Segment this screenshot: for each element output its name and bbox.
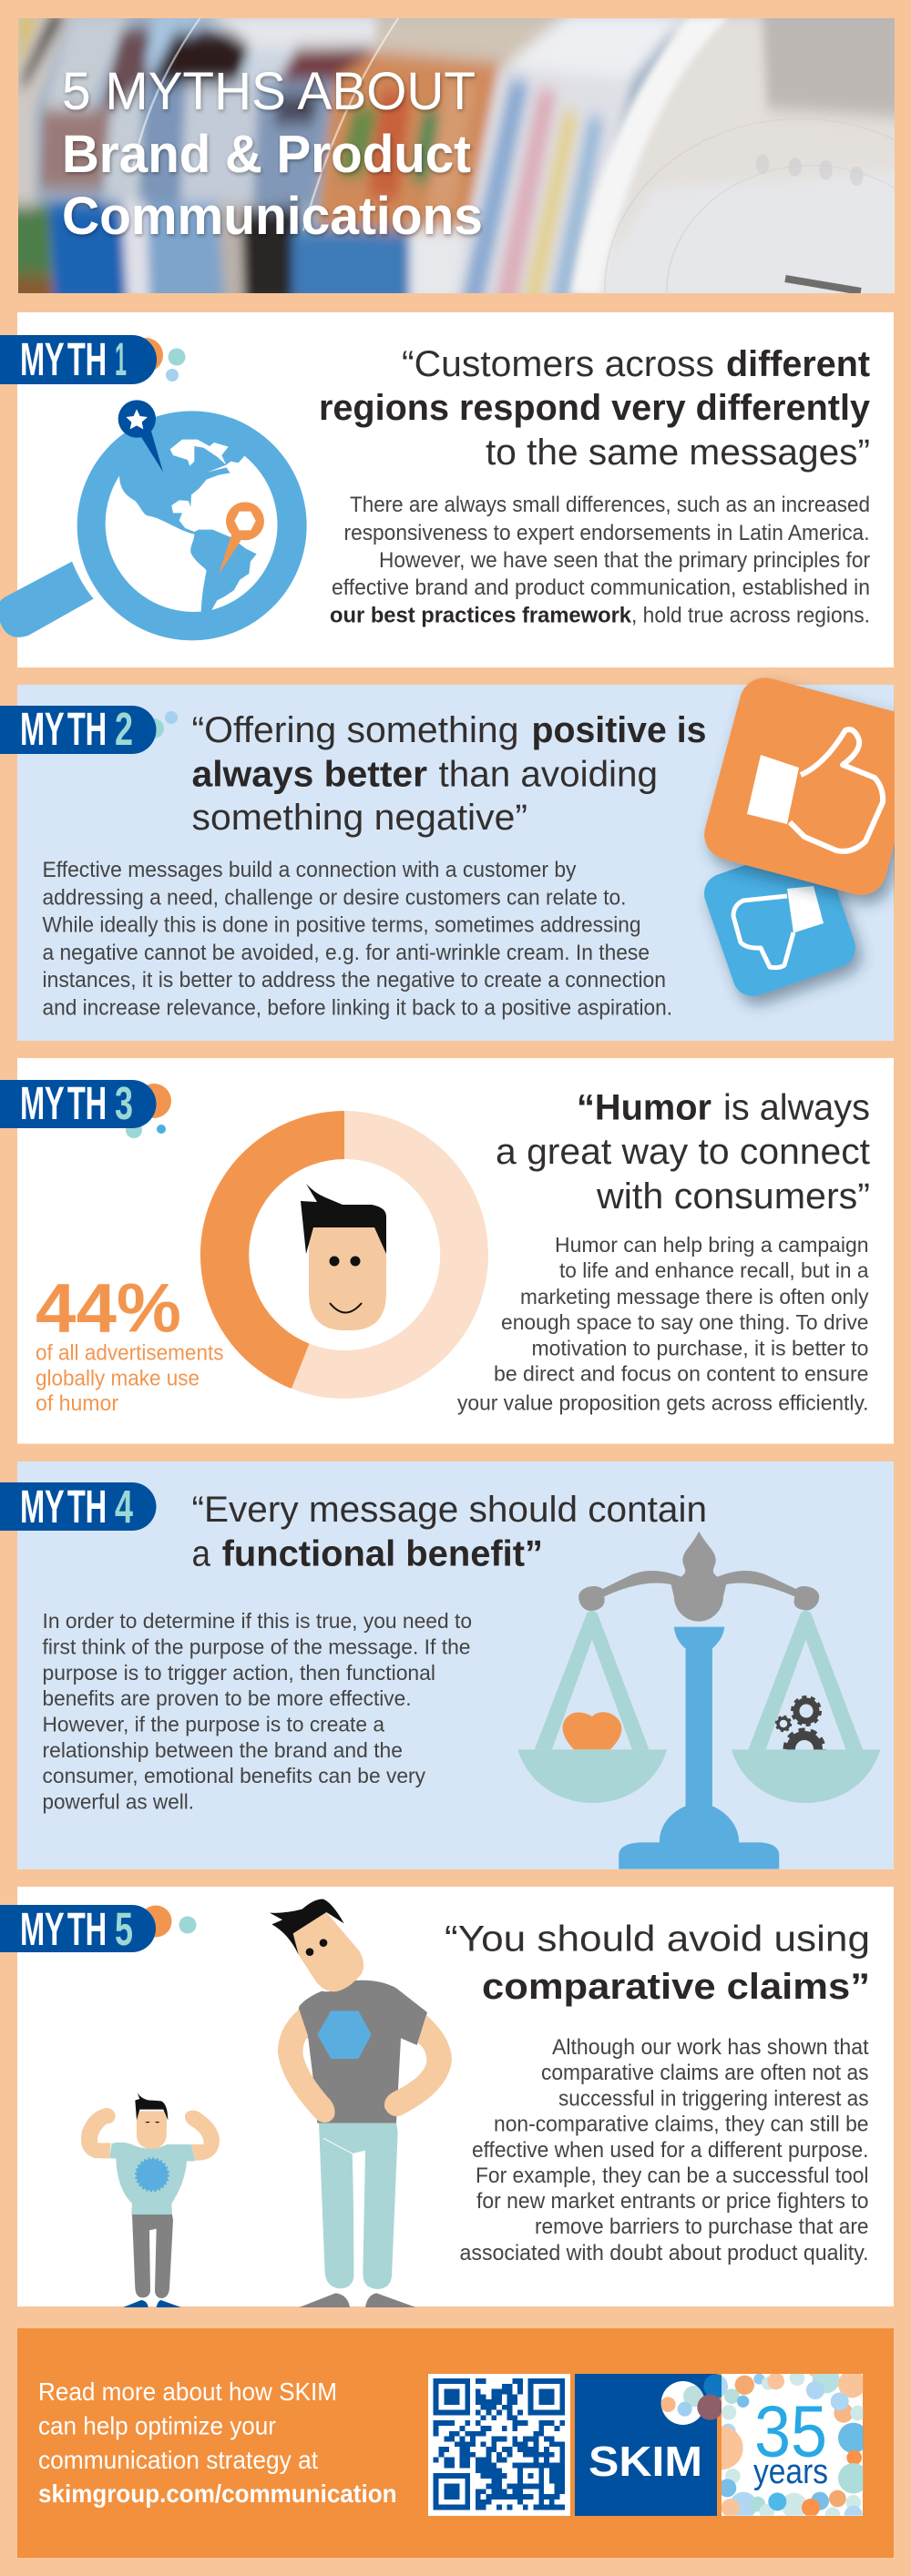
- body text: myth 1: , hold true across regions.: [631, 603, 870, 628]
- heading: myth 5: “You should avoid using: [445, 1919, 870, 1959]
- body text: myth 5: successful in triggering interest as: [558, 2087, 869, 2112]
- heading: myth 1: [319, 344, 871, 473]
- panel: footer call to action: [17, 2328, 894, 2558]
- body text: myth 4: powerful as well.: [42, 1790, 194, 1814]
- heading: myth 1: regions respond very differently: [319, 388, 871, 428]
- heading: myth 5: [445, 1919, 870, 2007]
- text: read more: skimgroup.com/communication: [38, 2479, 397, 2508]
- body text: myth 5: non-comparative claims, they can still be: [494, 2113, 869, 2136]
- body text: myth 3: to life and enhance recall, but in a: [559, 1258, 869, 1282]
- body text: myth 4: relationship between the brand and the: [42, 1738, 403, 1762]
- badge: myth 1: [0, 333, 186, 386]
- body text: myth 2: instances, it is better to address the negative to create a connection: [42, 968, 666, 993]
- heading: myth 4: [191, 1490, 707, 1573]
- illustration: small man: [81, 2092, 220, 2307]
- text: read more: [38, 2377, 397, 2508]
- icon: balance scale: [517, 1532, 880, 1869]
- panel: myth 2: [0, 672, 911, 1041]
- heading: myth 5: comparative claims”: [482, 1967, 870, 2007]
- panel: myth 4: [0, 1461, 894, 1869]
- header banner: [18, 18, 895, 293]
- body text: myth 1: responsiveness to expert endorsements in Latin America.: [344, 521, 869, 545]
- panel: myth 5: [0, 1887, 894, 2307]
- body text: myth 2: and increase relevance, before linking it back to a positive aspiration.: [42, 996, 672, 1020]
- banner photo: blurred printing press roll: [18, 18, 895, 293]
- QR code: [428, 2374, 570, 2516]
- heading: myth 2: “Offering something: [191, 710, 519, 750]
- body text: myth 4: benefits are proven to be more effective.: [42, 1686, 412, 1710]
- panel: myth 1: [0, 312, 894, 667]
- icon: thumbs down: [699, 840, 861, 1002]
- badge: myth 2: [0, 703, 178, 756]
- donut chart: 44%: [200, 1111, 488, 1399]
- body text: myth 5: effective when used for a different purpose.: [472, 2138, 869, 2163]
- badge: myth 1: 1: [115, 333, 127, 385]
- body text: myth 4: first think of the purpose of the message. If the: [42, 1635, 470, 1659]
- heading: myth 4: functional benefit”: [222, 1533, 543, 1573]
- heading: myth 4: a: [191, 1533, 211, 1573]
- badge: myth 5: 5: [115, 1903, 133, 1955]
- heading: myth 1: to the same messages”: [486, 433, 870, 473]
- body text: myth 5: Although our work has shown that: [552, 2035, 869, 2060]
- icon: magnifying glass globe: [0, 400, 307, 640]
- badge: myth 5: MYTH: [20, 1904, 107, 1956]
- icon: thumbs up: [699, 672, 911, 901]
- badge: myth 4: MYTH: [20, 1481, 107, 1533]
- body text: myth 1: There are always small differences, such as an increased: [350, 493, 870, 517]
- title: [62, 62, 483, 246]
- statistic: 44%: 44%: [36, 1269, 181, 1348]
- statistic: 44%: globally make use: [36, 1367, 200, 1391]
- heading: myth 2: than avoiding: [439, 754, 658, 794]
- logo: 35 years: 35: [754, 2391, 827, 2471]
- text: read more: can help optimize your: [38, 2411, 276, 2440]
- body text: myth 4: purpose is to trigger action, then functional: [42, 1661, 435, 1685]
- badge: myth 2: MYTH: [20, 704, 107, 756]
- panel: myth 3: [0, 1058, 894, 1444]
- heading: myth 2: [191, 710, 707, 838]
- heading: myth 3: [496, 1087, 870, 1217]
- body text: myth 3: motivation to purchase, it is better to: [532, 1337, 869, 1360]
- body text: myth 5: [459, 2035, 869, 2265]
- body text: myth 2: addressing a need, challenge or desire customers can relate to.: [42, 886, 627, 911]
- body text: myth 3: enough space to say one thing. To drive: [501, 1310, 869, 1334]
- icon: star pin: [118, 400, 163, 472]
- heading: myth 1: “Customers across: [402, 344, 714, 384]
- body text: myth 3: marketing message there is often only: [520, 1285, 869, 1308]
- body text: myth 1: However, we have seen that the primary principles for: [379, 548, 870, 573]
- badge: myth 4: [0, 1481, 157, 1533]
- heading: myth 3: “Humor: [577, 1087, 711, 1127]
- heading: myth 4: “Every message should contain: [191, 1490, 707, 1530]
- title: 5 MYTHS ABOUT: [62, 62, 476, 121]
- statistic: 44%: of humor: [36, 1391, 118, 1416]
- logo: 35 years: years: [753, 2453, 828, 2491]
- body text: myth 1: [330, 493, 870, 628]
- icon: gears: [776, 1697, 824, 1768]
- body text: myth 2: While ideally this is done in positive terms, sometimes addressing: [42, 912, 641, 938]
- body text: myth 5: comparative claims are often not as: [541, 2061, 869, 2085]
- badge: myth 3: 3: [115, 1077, 133, 1129]
- body text: myth 3: [457, 1233, 869, 1415]
- heading: myth 3: with consumers”: [596, 1176, 870, 1217]
- title: Brand & Product: [62, 125, 471, 184]
- body text: myth 4: consumer, emotional benefits can be very: [42, 1764, 425, 1787]
- statistic: 44%: [36, 1269, 224, 1416]
- heading: myth 3: is always: [723, 1087, 870, 1127]
- logo: 35 years: [722, 2374, 864, 2516]
- badge: myth 3: [0, 1077, 171, 1138]
- logo: SKIM: SKIM: [589, 2438, 702, 2485]
- body text: myth 3: your value proposition gets across efficiently.: [457, 1391, 869, 1415]
- body text: myth 5: For example, they can be a successful tool: [476, 2164, 869, 2188]
- badge: myth 3: MYTH: [20, 1078, 107, 1130]
- body text: myth 4: In order to determine if this is true, you need to: [42, 1609, 472, 1633]
- logo: SKIM: [575, 2374, 728, 2516]
- heading: myth 2: always better: [191, 754, 427, 794]
- body text: myth 2: Effective messages build a connection with a customer by: [42, 858, 576, 882]
- icon: smiling face: [301, 1184, 386, 1330]
- text: read more: Read more about how SKIM: [38, 2377, 337, 2406]
- icon: hexagon pin: [219, 502, 264, 575]
- body text: myth 3: be direct and focus on content to ensure: [494, 1362, 869, 1386]
- heading: myth 2: something negative”: [191, 798, 527, 838]
- body text: myth 2: [42, 858, 672, 1020]
- heading: myth 2: positive is: [532, 710, 707, 750]
- body text: myth 5: for new market entrants or price fighters to: [476, 2189, 869, 2214]
- illustration: tall man: [270, 1899, 452, 2307]
- body text: myth 5: remove barriers to purchase that are: [535, 2215, 869, 2239]
- statistic: 44%: of all advertisements: [36, 1340, 224, 1365]
- heading: myth 3: a great way to connect: [496, 1132, 870, 1172]
- body text: myth 1: our best practices framework: [330, 603, 632, 628]
- badge: myth 2: 2: [115, 703, 133, 755]
- badge: myth 1: MYTH: [20, 334, 107, 386]
- badge: myth 5: [0, 1903, 197, 1956]
- body text: myth 2: a negative cannot be avoided, e.g. for anti-wrinkle cream. In these: [42, 941, 650, 965]
- title: Communications: [62, 187, 483, 246]
- heading: myth 1: different: [726, 344, 870, 384]
- body text: myth 4: However, if the purpose is to create a: [42, 1713, 384, 1736]
- body text: myth 3: Humor can help bring a campaign: [555, 1233, 869, 1257]
- body text: myth 4: [42, 1609, 472, 1814]
- body text: myth 1: effective brand and product communication, established in: [332, 575, 870, 600]
- badge: myth 4: 4: [115, 1481, 133, 1532]
- text: read more: communication strategy at: [38, 2446, 318, 2474]
- body text: myth 5: associated with doubt about product quality.: [459, 2241, 869, 2265]
